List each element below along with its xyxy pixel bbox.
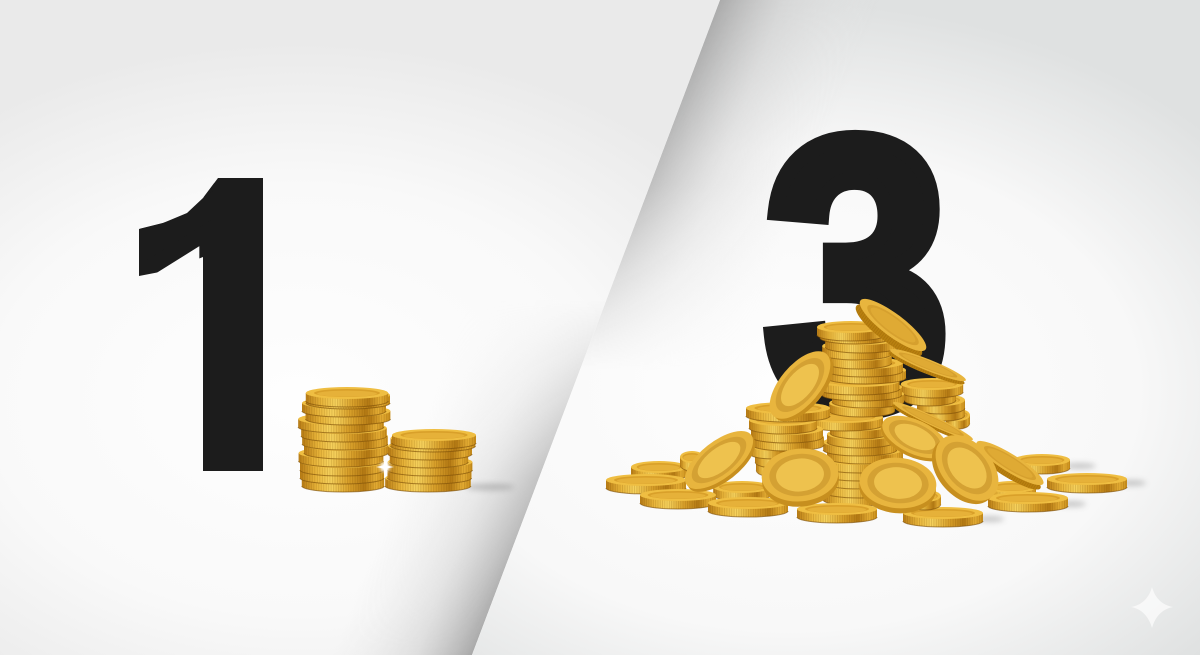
coin shadows	[466, 463, 1146, 522]
coin: tilted right	[969, 435, 1048, 496]
panel: right background	[472, 0, 1200, 655]
numeral: 3: 3	[764, 60, 950, 489]
coin: thin tilted middle	[890, 398, 975, 447]
panel: left background	[52, 229, 588, 655]
coin: tilted left	[676, 420, 765, 503]
coin: tilted middle	[875, 407, 954, 470]
numeral: 1: 1	[110, 94, 342, 559]
coin: front far right	[919, 423, 1011, 516]
coin: tilted on left stack	[758, 341, 845, 432]
coin: front right	[857, 455, 938, 516]
coin: tilted thin	[887, 345, 968, 389]
coin: front centre	[759, 445, 841, 510]
coins: small left stacks	[298, 387, 476, 492]
icon: sparkle on coins	[376, 458, 394, 476]
coins: large pile	[606, 292, 1127, 527]
icon: four-point star watermark	[1131, 587, 1173, 628]
coin: tilted top right	[850, 292, 932, 364]
